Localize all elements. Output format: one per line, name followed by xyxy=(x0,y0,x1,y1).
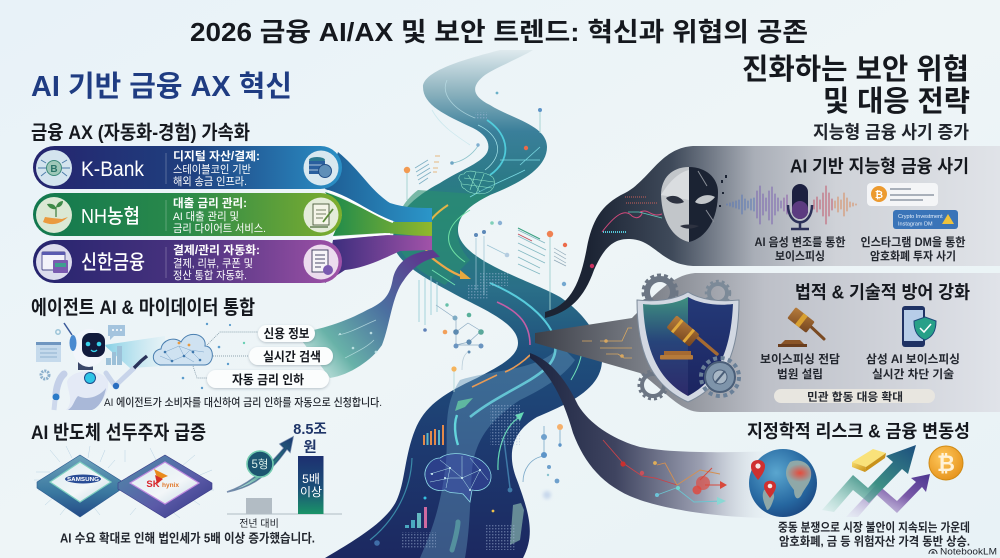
ribbon tail: NH xyxy=(325,192,432,237)
subheading: fraud: 지능형 금융 사기 증가 xyxy=(813,122,969,142)
title: 2026 금융 AI/AX 및 보안 트렌드: 혁신과 위협의 공존 xyxy=(190,17,808,47)
central winding road xyxy=(325,50,602,558)
icon: DM chat bubbles: Crypto Investment xyxy=(898,214,943,220)
pill: NH xyxy=(33,193,342,236)
caption: voice phishing court xyxy=(760,353,840,381)
pill: K-Bank: K-Bank xyxy=(81,158,144,181)
icon: globe with pins xyxy=(749,449,817,517)
icon: Samsung chip xyxy=(37,455,123,517)
watermark: NotebookLM: NotebookLM xyxy=(940,546,997,558)
icon: split mask xyxy=(661,167,727,242)
bar: 8.5 trillion xyxy=(298,456,324,514)
bar chart: corporate tax growth xyxy=(227,422,342,530)
pills: data labels: 실시간 검색 xyxy=(263,350,321,364)
bar chart: corporate tax growth: 전년 대비 xyxy=(239,518,279,530)
icon: phone with shield xyxy=(902,306,936,347)
right section heading xyxy=(742,53,970,118)
caption: Samsung blocking tech: 삼성 AI 보이스피싱 xyxy=(866,353,960,366)
icon: coin stack xyxy=(304,150,338,186)
ribbon 3 signal traces xyxy=(603,440,727,505)
pill: public-private response: 민관 합동 대응 확대 xyxy=(807,390,903,404)
value label: 8.5조 xyxy=(293,422,327,438)
icon: voice waveform and microphone xyxy=(727,184,856,229)
icon: checklist document xyxy=(304,244,338,280)
pill: Shinhan: 결제/관리 자동화: xyxy=(173,243,260,257)
panel 3 heading: 지정학적 리스크 & 금융 변동성 xyxy=(747,422,970,442)
ribbon tail: Shinhan xyxy=(325,235,432,283)
pill: K-Bank xyxy=(33,146,342,189)
pill: Shinhan: 정산 통합 자동화. xyxy=(173,269,247,282)
caption: Instagram DM scam xyxy=(860,235,966,263)
caption: geopolitical risk: 암호화폐, 금 등 위험자산 가격 동반 상승. xyxy=(779,534,970,548)
pill: Shinhan: 결제, 리뷰, 쿠폰 및 xyxy=(173,257,253,270)
right ribbon 1 xyxy=(545,146,1000,318)
subheading: finance AX: 금융 AX (자동화-경험) 가속화 xyxy=(31,122,250,144)
pill: Shinhan xyxy=(33,240,342,283)
bar: 8.5 trillion: 5배 xyxy=(302,472,320,486)
icon: shield with gavel and gears xyxy=(637,275,739,402)
icon: blockchain coin: B xyxy=(50,164,58,175)
right ribbon 3 xyxy=(530,353,775,518)
ribbon 1 signal traces xyxy=(590,197,662,268)
pills: data labels xyxy=(207,325,333,388)
panel 2 heading: 법적 & 기술적 방어 강화 xyxy=(795,282,970,302)
icon: data cloud xyxy=(153,323,258,389)
subheading: agent AI: 에이전트 AI & 마이데이터 통합 xyxy=(31,297,255,319)
caption: agent AI: AI 에이전트가 소비자를 대신하여 금리 인하를 자동으로 신청합니다. xyxy=(104,395,382,409)
floating data decorations around road xyxy=(404,92,567,499)
chip circuit lines xyxy=(34,446,214,518)
right section heading: 및 대응 전략 xyxy=(823,85,970,118)
caption: voice phishing court: 보이스피싱 전담 xyxy=(760,353,840,366)
icon: DM chat bubbles: Instagram DM xyxy=(898,222,933,228)
growth arrow xyxy=(227,437,293,492)
right ribbon 2 xyxy=(535,273,1000,412)
value label: 원 xyxy=(303,439,317,456)
icon: Samsung chip: SAMSUNG xyxy=(67,477,100,483)
caption: voice phishing: AI 음성 변조를 통한 xyxy=(754,235,846,249)
bar: prior year xyxy=(246,498,272,514)
icon: browser windows xyxy=(36,244,72,280)
icon: SK hynix chip: hynix xyxy=(162,482,179,489)
pill: K-Bank: 해외 송금 인프라. xyxy=(173,174,247,188)
pill: NH: AI 대출 관리 및 xyxy=(173,210,239,223)
brain icon: upper road xyxy=(459,171,495,194)
pill: NH: NH농협 xyxy=(81,205,140,228)
caption: voice phishing: 보이스피싱 xyxy=(775,250,825,263)
pill: NH: 금리 다이어트 서비스. xyxy=(173,222,266,235)
pills: data labels: 신용 정보 xyxy=(264,327,310,341)
beam from robot to cloud xyxy=(104,336,165,368)
pill: public-private response xyxy=(774,389,935,404)
subheading: AI chips: AI 반도체 선두주자 급증 xyxy=(31,422,206,444)
icon: robot agent xyxy=(36,323,147,410)
icon: rising arrows xyxy=(822,445,930,517)
icon: blockchain coin xyxy=(36,150,72,186)
caption: voice phishing xyxy=(754,235,846,263)
ribbon 2 signal traces xyxy=(582,328,632,358)
icon: SK hynix chip xyxy=(118,455,212,518)
icon: document with pen xyxy=(304,198,338,232)
caption: Instagram DM scam: 인스타그램 DM을 통한 xyxy=(860,235,966,249)
caption: voice phishing court: 법원 설립 xyxy=(777,367,823,381)
icon: gavel xyxy=(778,307,824,347)
right section heading: 진화하는 보안 위협 xyxy=(742,53,969,86)
icon: DM chat bubbles xyxy=(867,183,958,229)
pill: NH: 대출 금리 관리: xyxy=(173,196,247,210)
icon: bitcoin coin xyxy=(929,446,963,480)
panel 1 heading: AI 기반 지능형 금융 사기 xyxy=(790,156,969,176)
icon: SK hynix chip: SK xyxy=(146,479,160,490)
caption: geopolitical risk xyxy=(778,520,970,548)
caption: Samsung blocking tech xyxy=(866,353,960,381)
pills: data labels: 자동 금리 인하 xyxy=(232,373,304,387)
icon: hand with sprout xyxy=(36,197,72,233)
purple swoosh to agent section xyxy=(296,250,440,378)
icon: gold bar xyxy=(852,449,886,472)
icon: bitcoin coin: ₿ xyxy=(937,451,955,476)
ribbon tail: K-Bank xyxy=(325,152,432,222)
left section heading: AI 기반 금융 AX 혁신 xyxy=(31,70,292,103)
caption: AI chips: AI 수요 확대로 인해 법인세가 5배 이상 증가했습니다. xyxy=(60,530,315,546)
icon: DM chat bubbles: ₿ xyxy=(875,189,883,201)
pill: Shinhan: 신한금융 xyxy=(81,251,145,274)
brain icon: lower road xyxy=(425,454,491,502)
caption: Samsung blocking tech: 실시간 차단 기술 xyxy=(872,367,954,381)
bar: 8.5 trillion: 이상 xyxy=(300,485,322,499)
pill: K-Bank: 디지털 자산/결제: xyxy=(173,149,260,163)
pill: K-Bank: 스테이블코인 기반 xyxy=(173,163,251,176)
growth badge: 5형 xyxy=(252,458,268,471)
caption: Instagram DM scam: 암호화폐 투자 사기 xyxy=(870,249,956,263)
caption: geopolitical risk: 중동 분쟁으로 시장 불안이 지속되는 가운데 xyxy=(778,520,970,534)
value label xyxy=(293,422,327,456)
